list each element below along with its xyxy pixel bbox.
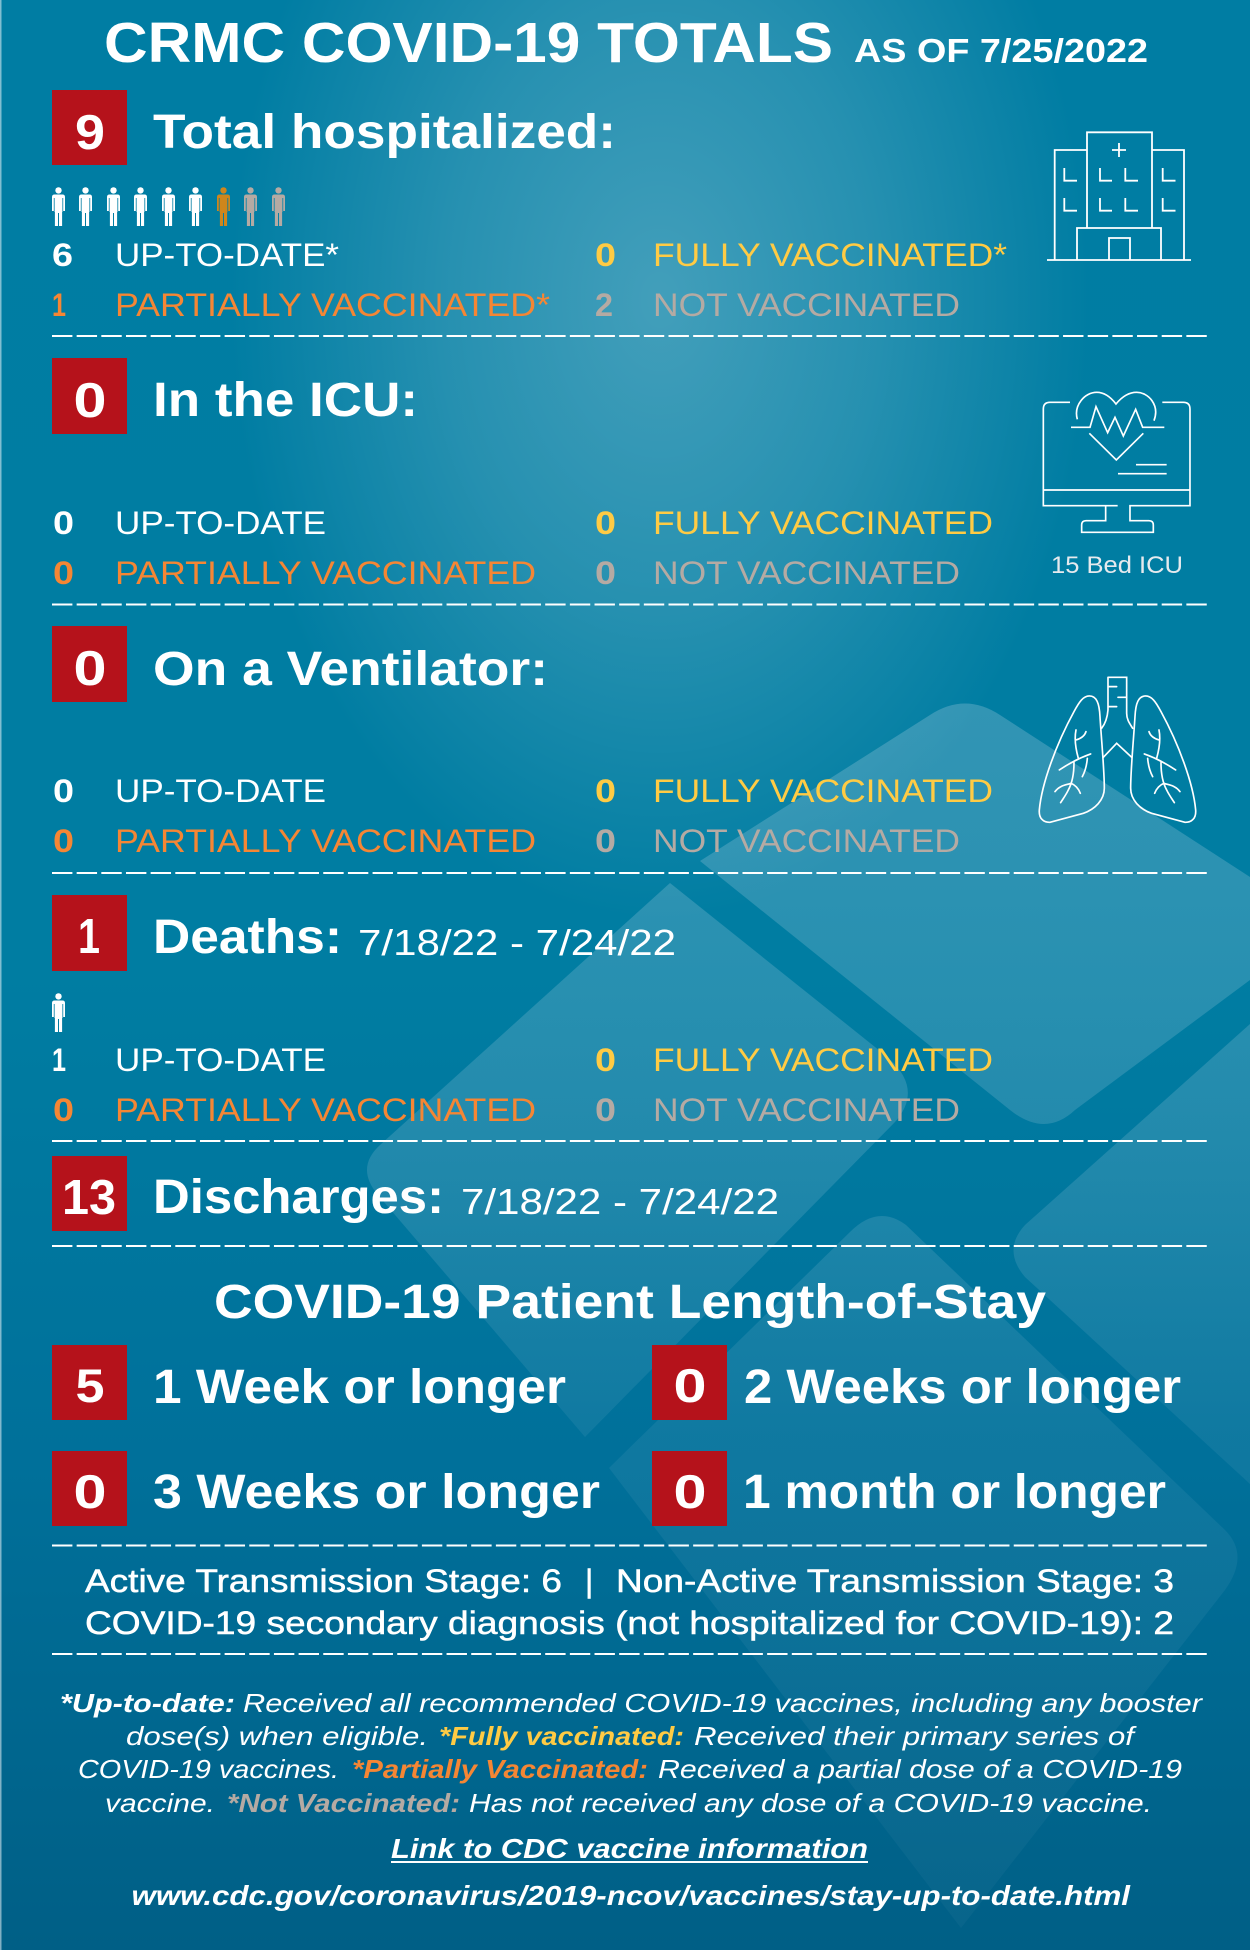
heading: deaths: Deaths: bbox=[153, 911, 342, 964]
heading: on a ventilator: On a Ventilator: bbox=[153, 643, 548, 696]
count badge: 9: 9 bbox=[75, 106, 105, 160]
title bbox=[104, 11, 1148, 75]
count badge: 0 bbox=[52, 626, 127, 702]
stat: not vaccinated: NOT VACCINATED bbox=[653, 823, 960, 859]
stat: partially vaccinated: 0 bbox=[53, 823, 74, 859]
stat: not vaccinated: NOT VACCINATED bbox=[653, 555, 960, 591]
icon: one patient bbox=[52, 993, 65, 1032]
stat: fully vaccinated: 0 bbox=[595, 773, 616, 809]
stat: up-to-date: UP-TO-DATE bbox=[115, 773, 326, 809]
footnote: vaccination definitions: vaccine. bbox=[105, 1788, 215, 1818]
stat: up-to-date: UP-TO-DATE* bbox=[115, 237, 339, 273]
transmission stage summary: COVID-19 secondary diagnosis (not hospitalized for COVID-19): 2 bbox=[85, 1605, 1174, 1641]
stay: 1 month or longer: 0 bbox=[674, 1465, 706, 1518]
panel: on a ventilator bbox=[52, 626, 1196, 859]
transmission stage summary bbox=[85, 1563, 1174, 1641]
transmission stage summary: | bbox=[585, 1563, 593, 1599]
transmission stage summary: Non-Active Transmission Stage: 3 bbox=[616, 1563, 1174, 1599]
stat: up-to-date: UP-TO-DATE bbox=[115, 1042, 326, 1078]
stat: not vaccinated: 0 bbox=[595, 555, 616, 591]
footnote: vaccination definitions: *Fully vaccinated: bbox=[439, 1721, 684, 1751]
footnote: vaccination definitions: Received all recommended COVID-19 vaccines, including any booster bbox=[243, 1688, 1204, 1718]
stay: 2 weeks or longer bbox=[652, 1345, 1181, 1420]
panel: deaths bbox=[52, 895, 993, 1128]
stat: fully vaccinated: FULLY VACCINATED bbox=[653, 1042, 993, 1078]
stay: 1 week or longer: 5 bbox=[76, 1359, 104, 1412]
count badge: 0: 0 bbox=[74, 642, 106, 696]
heading: in the ICU: In the ICU: bbox=[153, 374, 418, 427]
stat: not vaccinated: 2 bbox=[595, 287, 613, 323]
stat: fully vaccinated: FULLY VACCINATED bbox=[653, 505, 993, 541]
icon caption: 15 bed ICU: 15 Bed ICU bbox=[1051, 552, 1183, 579]
stay: 3 weeks or longer: 0 bbox=[74, 1465, 106, 1518]
stay: 3 weeks or longer: 3 Weeks or longer bbox=[153, 1466, 600, 1519]
stat: fully vaccinated: 0 bbox=[595, 1042, 616, 1078]
date range: 7/18/22 - 7/24/22 bbox=[461, 1181, 779, 1222]
stat: up-to-date: 1 bbox=[52, 1042, 66, 1078]
stat: fully vaccinated: 0 bbox=[595, 505, 616, 541]
heading: total hospitalized: Total hospitalized: bbox=[153, 106, 616, 159]
panel: patient length of stay bbox=[52, 1276, 1181, 1526]
panel: total hospitalized bbox=[52, 90, 1191, 323]
icon row: nine patients by vaccine status bbox=[52, 187, 285, 226]
stat: not vaccinated: 0 bbox=[595, 1092, 616, 1128]
footnote: vaccination definitions: *Not Vaccinated: bbox=[227, 1788, 460, 1818]
stay: 3 weeks or longer bbox=[52, 1451, 600, 1526]
footnote: vaccination definitions: *Up-to-date: bbox=[60, 1688, 235, 1718]
footnote: vaccination definitions bbox=[60, 1688, 1204, 1818]
footnote: vaccination definitions: Received their primary series of bbox=[694, 1721, 1137, 1751]
stay: 1 week or longer bbox=[52, 1345, 566, 1420]
title: AS OF 7/25/2022 bbox=[854, 32, 1148, 69]
heading: length of stay: COVID-19 Patient Length-of-Stay bbox=[214, 1276, 1046, 1329]
heading: discharges: Discharges: bbox=[153, 1171, 444, 1224]
count badge: 0: 0 bbox=[74, 374, 106, 428]
footnote: vaccination definitions: *Partially Vaccinated: bbox=[352, 1754, 648, 1784]
stat: up-to-date: 6 bbox=[52, 237, 73, 273]
stay: 2 weeks or longer: 2 Weeks or longer bbox=[744, 1361, 1181, 1414]
stat: partially vaccinated: PARTIALLY VACCINATED bbox=[115, 823, 536, 859]
stay: 2 weeks or longer: 0 bbox=[674, 1359, 706, 1412]
footnote: vaccination definitions: Has not received any dose of a COVID-19 vaccine. bbox=[469, 1788, 1152, 1818]
footnote: vaccination definitions: dose(s) when eligible. bbox=[126, 1721, 428, 1751]
stat: partially vaccinated: PARTIALLY VACCINATED* bbox=[115, 287, 550, 323]
stat: partially vaccinated: 1 bbox=[52, 287, 66, 323]
count badge: 1 bbox=[52, 895, 127, 971]
stat: fully vaccinated: FULLY VACCINATED bbox=[653, 773, 993, 809]
count badge: 13: 13 bbox=[62, 1171, 116, 1225]
date range: 7/18/22 - 7/24/22 bbox=[358, 922, 676, 963]
stat: up-to-date: UP-TO-DATE bbox=[115, 505, 326, 541]
stat: fully vaccinated: 0 bbox=[595, 237, 616, 273]
stat: not vaccinated: NOT VACCINATED bbox=[653, 1092, 960, 1128]
footnote: vaccination definitions: Received a partial dose of a COVID-19 bbox=[658, 1754, 1182, 1784]
stat: partially vaccinated: PARTIALLY VACCINATED bbox=[115, 555, 536, 591]
stat: not vaccinated: NOT VACCINATED bbox=[653, 287, 960, 323]
stay: 1 month or longer bbox=[652, 1451, 1166, 1526]
stat: fully vaccinated: FULLY VACCINATED* bbox=[653, 237, 1007, 273]
icon: heart monitor bbox=[1043, 392, 1190, 532]
count badge: 1: 1 bbox=[78, 910, 100, 964]
icon: hospital bbox=[1047, 132, 1191, 260]
stat: up-to-date: 0 bbox=[53, 773, 74, 809]
stat: partially vaccinated: 0 bbox=[53, 1092, 74, 1128]
title: CRMC COVID-19 TOTALS bbox=[104, 11, 833, 75]
stay: 1 month or longer: 1 month or longer bbox=[743, 1466, 1166, 1519]
count badge: 13 bbox=[52, 1156, 127, 1231]
footnote: vaccination definitions: COVID-19 vaccines. bbox=[78, 1754, 339, 1784]
stay: 1 week or longer: 1 Week or longer bbox=[153, 1361, 566, 1414]
stat: not vaccinated: 0 bbox=[595, 823, 616, 859]
stat: partially vaccinated: 0 bbox=[53, 555, 74, 591]
link heading: CDC vaccine information: Link to CDC vaccine information bbox=[391, 1833, 868, 1864]
panel: discharges bbox=[52, 1156, 779, 1231]
CDC url: www.cdc.gov/coronavirus/2019-ncov/vaccines/stay-up-to-date.html bbox=[132, 1880, 1131, 1911]
transmission stage summary: Active Transmission Stage: 6 bbox=[85, 1563, 562, 1599]
stat: partially vaccinated: PARTIALLY VACCINATED bbox=[115, 1092, 536, 1128]
panel: in the ICU bbox=[52, 358, 1190, 591]
count badge: 0 bbox=[52, 358, 127, 434]
icon: lungs bbox=[1039, 677, 1196, 822]
count badge: 9 bbox=[52, 90, 127, 165]
stat: up-to-date: 0 bbox=[53, 505, 74, 541]
